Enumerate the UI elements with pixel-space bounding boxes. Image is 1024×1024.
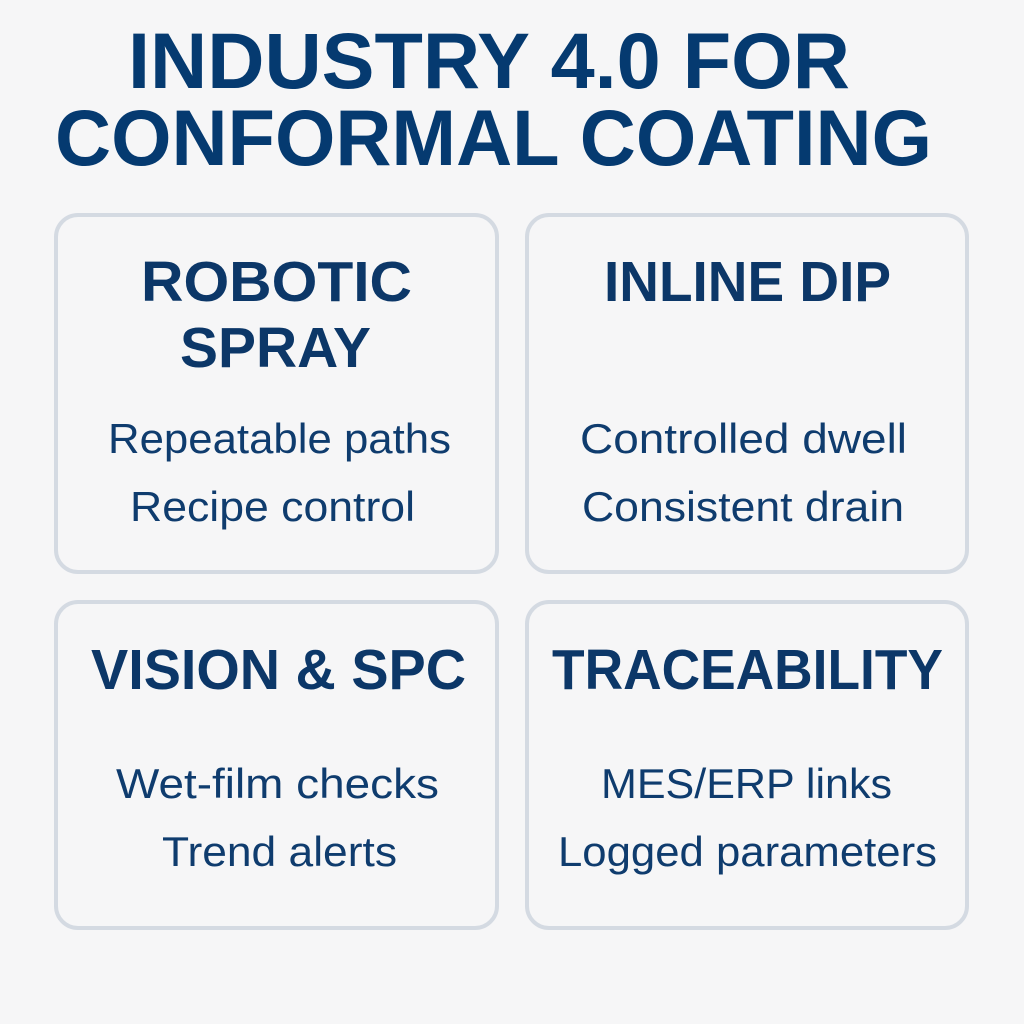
heading: robotic spray: ROBOTIC [141, 250, 412, 314]
text: traceability benefits [558, 760, 937, 875]
panel: robotic spray [56, 215, 497, 572]
heading: vision and spc: VISION & SPC [91, 638, 466, 702]
text: inline dip benefits [580, 415, 907, 530]
heading: robotic spray: SPRAY [180, 316, 371, 380]
heading: traceability: TRACEABILITY [552, 638, 943, 702]
heading: inline dip: INLINE DIP [604, 250, 891, 314]
text: robotic spray benefits: Recipe control [130, 483, 415, 530]
heading: robotic spray [141, 250, 412, 380]
text: robotic spray benefits [108, 415, 451, 530]
panel: vision and spc [56, 602, 497, 928]
text: vision and spc benefits [116, 760, 439, 875]
panel: traceability [527, 602, 967, 928]
text: vision and spc benefits: Trend alerts [162, 828, 397, 875]
panel: inline dip [527, 215, 967, 572]
text: traceability benefits: MES/ERP links [601, 760, 892, 807]
text: vision and spc benefits: Wet-film checks [116, 760, 439, 807]
text: inline dip benefits: Consistent drain [582, 483, 904, 530]
text: robotic spray benefits: Repeatable paths [108, 415, 451, 462]
text: inline dip benefits: Controlled dwell [580, 415, 907, 462]
title: CONFORMAL COATING [55, 93, 932, 182]
text: traceability benefits: Logged parameters [558, 828, 937, 875]
title [55, 16, 932, 182]
title: INDUSTRY 4.0 FOR [128, 16, 850, 105]
